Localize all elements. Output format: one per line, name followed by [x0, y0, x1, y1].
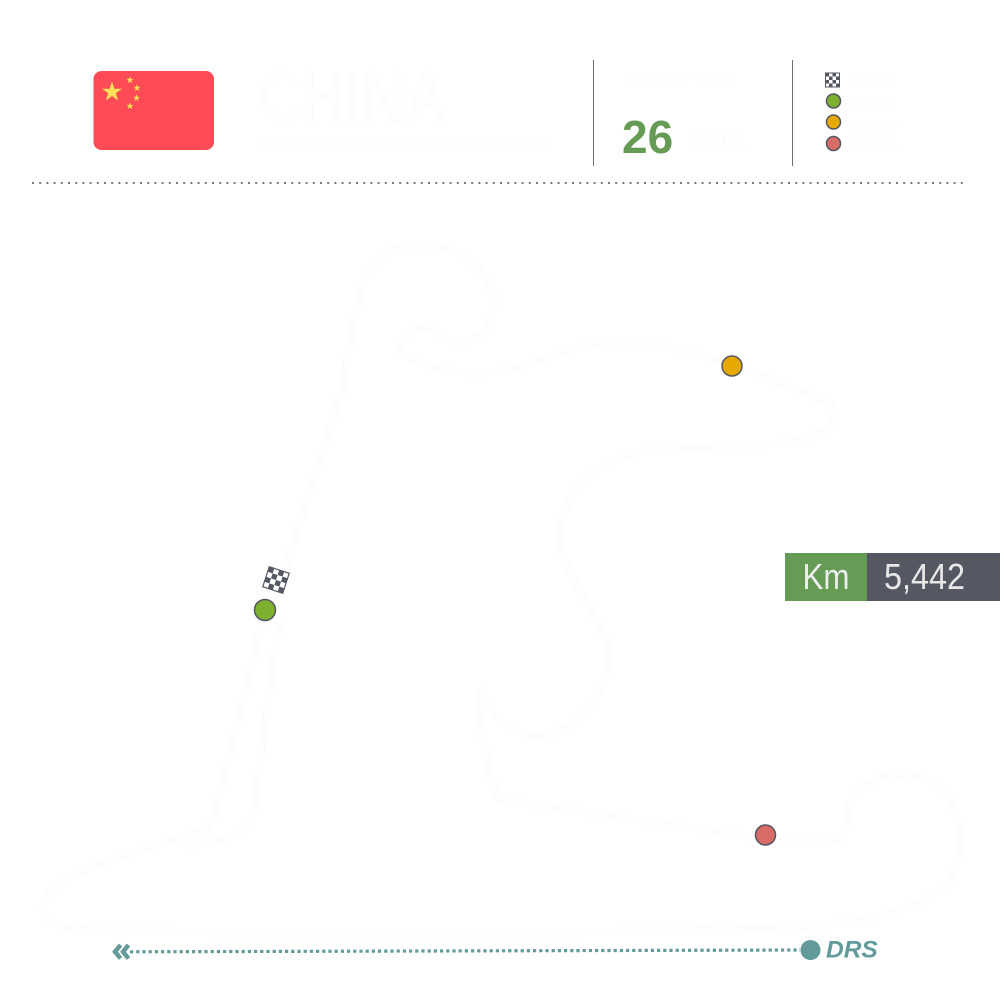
km label: Km	[803, 556, 849, 597]
legend labels	[851, 72, 887, 152]
legend: sector 1	[826, 94, 840, 108]
legend labels: SECT. 1	[851, 96, 899, 112]
track length badge	[785, 553, 1000, 601]
flag of China	[94, 71, 214, 150]
pitstop unit: SEC.	[686, 123, 747, 153]
subtitle: SHANGHAI INTERNATIONAL CIRCUIT	[258, 134, 552, 156]
title: CHINA	[258, 57, 448, 138]
km label	[785, 553, 867, 601]
legend: sector 3	[826, 136, 840, 150]
legend: start flag	[826, 73, 840, 87]
dotted separator	[32, 182, 963, 184]
DRS arrow	[112, 936, 878, 964]
legend labels: START	[851, 75, 892, 90]
marker: sector 2	[721, 355, 743, 377]
divider left	[593, 60, 594, 166]
DRS arrow: DRS	[826, 936, 878, 964]
marker: sector 3	[754, 824, 776, 846]
legend	[825, 72, 842, 152]
legend labels: SECT. 3	[851, 140, 899, 154]
legend: sector 2	[826, 115, 840, 129]
pitstop value: 26	[622, 111, 673, 163]
legend labels: SECT. 2	[851, 118, 899, 133]
marker: sector 1	[254, 598, 276, 622]
divider right	[792, 60, 793, 166]
marker: start flag	[262, 566, 290, 594]
km value: 5,442	[884, 556, 965, 597]
pitstop heading: PITSTOP TIME	[623, 70, 735, 90]
